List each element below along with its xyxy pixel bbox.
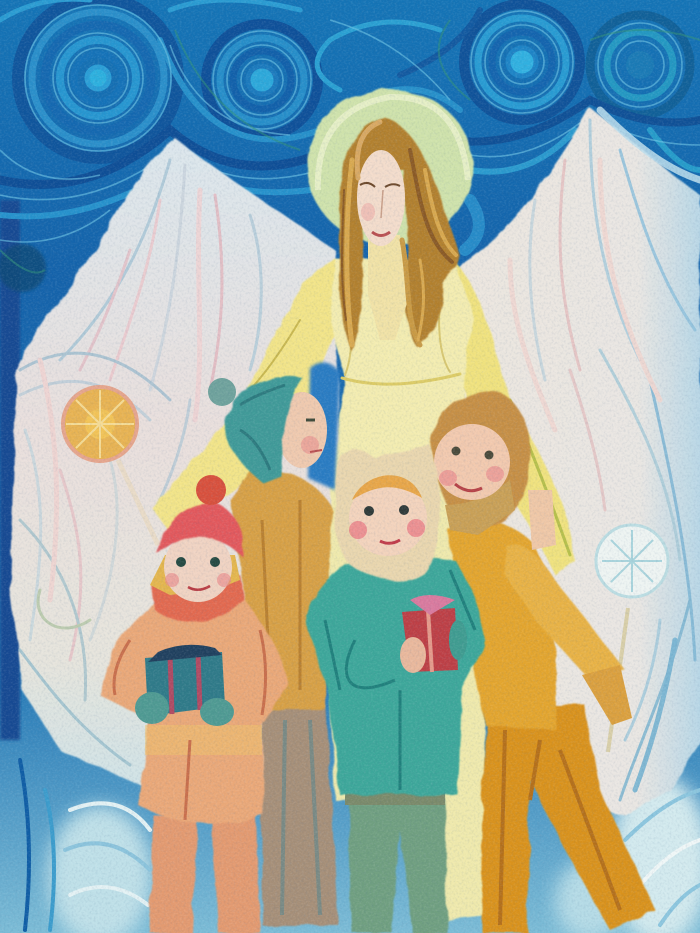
angel: dress shading	[245, 300, 570, 555]
hand on shoulder	[528, 490, 556, 550]
gift hands	[400, 637, 426, 673]
lower skirt	[325, 470, 488, 920]
legs	[348, 790, 447, 933]
scarf	[445, 480, 515, 535]
angel: hair strands	[342, 122, 456, 345]
dress body	[330, 258, 475, 480]
arm	[505, 544, 625, 680]
hat	[224, 377, 303, 482]
face	[277, 392, 327, 468]
coat	[230, 469, 332, 710]
child: back with teal hat	[208, 377, 338, 925]
swirl: connecting waves	[0, 0, 700, 292]
coat	[448, 519, 555, 730]
hood scarf	[334, 445, 440, 581]
child: left in peach	[100, 475, 288, 933]
right lollipop	[596, 525, 668, 752]
swirl: top left	[18, 0, 178, 158]
pants	[482, 705, 655, 933]
pants	[262, 690, 338, 925]
hat	[158, 503, 244, 558]
feather strokes: left wing	[20, 160, 261, 765]
hood	[432, 391, 530, 530]
child: centre in teal	[306, 445, 483, 933]
angel: hair back	[339, 118, 459, 352]
mittens	[135, 692, 169, 724]
swirl: top centre	[206, 24, 318, 136]
blue gap by angel waist	[308, 362, 340, 490]
swirl: top right	[464, 4, 690, 120]
cuff	[582, 665, 632, 725]
angel: face and neck	[357, 150, 408, 340]
right wing	[440, 108, 700, 815]
feather strokes: right wing	[510, 110, 700, 800]
gift box	[145, 652, 225, 716]
left wing	[10, 138, 340, 790]
fine crayon lines in sky	[0, 5, 700, 242]
coat	[306, 557, 483, 795]
left arm	[152, 258, 345, 530]
angel: dress and arms	[152, 258, 574, 920]
child: right in orange	[432, 391, 655, 933]
left lollipop	[63, 387, 158, 545]
scarf	[152, 575, 245, 622]
halo	[307, 89, 473, 245]
legs	[150, 815, 197, 933]
hair	[150, 555, 240, 595]
bottom swirl strokes	[20, 760, 700, 930]
face	[349, 480, 427, 556]
face	[164, 532, 232, 602]
coat	[100, 592, 288, 824]
right arm	[445, 262, 574, 575]
red gift	[402, 608, 458, 672]
face	[434, 424, 510, 500]
